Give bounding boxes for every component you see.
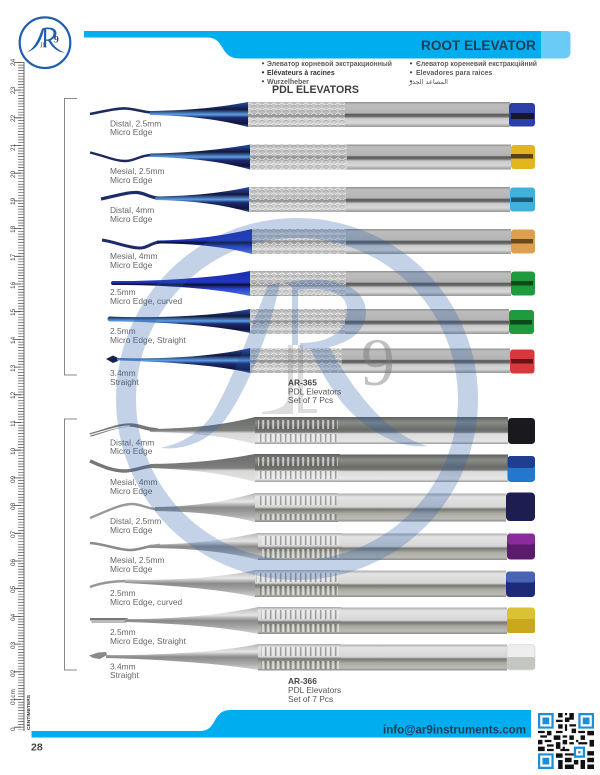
instrument: silver distal 4mm [90,417,535,444]
label: straight 3.4mm: Straight [110,670,140,680]
ruler: 18 [10,225,17,233]
email: info@ar9instruments.com [383,722,526,736]
ruler: 05 [10,585,17,593]
label: Distal 2.5mm: Distal, 2.5mm [110,118,161,128]
watermark: AR9 logo [126,228,468,570]
ruler: 21 [10,143,17,151]
ruler: 16 [10,281,17,289]
label: straight 2.5mm: 2.5mm [110,627,136,637]
multilingual name list: Elévateurs à racines [267,70,335,77]
label: Mesial 4mm: Micro Edge [110,486,153,496]
ruler: 08 [10,502,17,510]
label: Mesial 2.5mm: Mesial, 2.5mm [110,166,164,176]
instrument: blue curved 2.5mm [111,271,535,296]
ruler: 0 [10,727,17,731]
label: curved 2.5mm: Micro Edge, curved [110,597,182,607]
multilingual name list: Єлеватор кореневий екстракційний [416,60,537,68]
watermark: letters A and R [160,280,428,448]
ruler: CENTIMETERS [26,694,32,730]
bracket: upper set [64,98,77,375]
instrument: silver mesial 4mm [90,454,535,482]
ruler: 12 [10,391,17,399]
header band [84,31,570,58]
label: curved 2.5mm: 2.5mm [110,588,136,598]
logo: AR9 roundel: JL [40,42,47,50]
ruler: 06 [10,558,17,566]
ruler: 13 [10,364,17,372]
QR code [538,713,594,769]
instrument: silver straight 3.4mm [89,644,535,670]
bracket: lower set [64,419,77,670]
ruler: 22 [10,114,17,122]
multilingual name list: Элеватор корневой экстракционный [267,60,392,68]
label: straight 3.4mm: Straight [110,377,140,387]
ruler: 04 [10,613,17,621]
ruler: 24 [10,58,17,66]
ruler: 17 [10,253,17,261]
instrument: blue mesial 2.5mm [90,144,535,170]
label: straight 2.5mm: Micro Edge, Straight [110,636,187,646]
label: Mesial 4mm: Mesial, 4mm [110,477,157,487]
instrument: silver mesial 2.5mm [90,533,535,560]
multilingual name list [262,60,537,86]
instrument: blue straight 3.4mm [106,348,534,374]
ruler [10,58,32,731]
instrument: silver curved 2.5mm [90,570,535,597]
logo: AR9 roundel: 9 [54,36,59,46]
label: Distal 2.5mm: Micro Edge [110,127,153,137]
watermark: serif glyphs [262,324,395,414]
ruler: 07 [10,530,17,538]
label: Mesial 4mm: Micro Edge [110,260,153,270]
label: Mesial 2.5mm: Mesial, 2.5mm [110,555,164,565]
footer band [32,710,531,738]
set caption: AR-365: PDL Elevators [288,386,341,396]
label: curved 2.5mm: Micro Edge, curved [110,296,182,306]
label: straight 3.4mm: 3.4mm [110,368,136,378]
ruler: 09 [10,475,17,483]
heading: PDL Elevators: PDL ELEVATORS [272,84,359,96]
multilingual name list: Elevadores para raices [416,70,492,77]
multilingual name list: المصاعد الجذر [408,78,448,86]
label: Distal 4mm: Distal, 4mm [110,205,154,215]
watermark: serif glyphs: 9 [361,324,395,400]
label: Mesial 2.5mm: Micro Edge [110,175,153,185]
ruler: 03 [10,641,17,649]
ruler: 15 [10,308,17,316]
label: Distal 4mm: Micro Edge [110,214,153,224]
label: Distal 2.5mm: Distal, 2.5mm [110,516,161,526]
label: straight 2.5mm: 2.5mm [110,326,136,336]
label: Mesial 4mm: Mesial, 4mm [110,251,157,261]
logo: AR9 roundel [20,17,70,68]
label: straight 2.5mm: Micro Edge, Straight [110,335,187,345]
title: ROOT ELEVATOR [421,38,536,53]
ruler: 23 [10,86,17,94]
ruler: 20 [10,170,17,178]
ruler: 02 [10,669,17,677]
instrument: silver straight 2.5mm [90,607,535,634]
ruler: 01cm [10,689,17,705]
instrument: blue distal 4mm [101,187,535,212]
label: curved 2.5mm: 2.5mm [110,287,136,297]
label: Mesial 2.5mm: Micro Edge [110,564,153,574]
watermark: ring [126,228,468,570]
instrument: blue distal 2.5mm [90,102,535,127]
ruler: 14 [10,336,17,344]
set caption: AR-365: AR-365 [288,378,317,388]
page number: 28 [31,742,43,754]
label: Distal 4mm: Micro Edge [110,446,153,456]
set caption: AR-366: Set of 7 Pcs [288,694,333,704]
instrument: silver distal 2.5mm [90,492,535,522]
ruler: 19 [10,197,17,205]
ruler: 10 [10,447,17,455]
set caption: AR-366: PDL Elevators [288,685,341,695]
label: Distal 4mm: Distal, 4mm [110,438,154,448]
set caption: AR-366: AR-366 [288,676,317,686]
set caption: AR-365: Set of 7 Pcs [288,395,333,405]
instrument: blue straight 2.5mm [108,309,534,334]
multilingual name list: Wurzelheber [267,79,309,86]
label: straight 3.4mm: 3.4mm [110,662,136,672]
label: Distal 2.5mm: Micro Edge [110,525,153,535]
instrument: blue mesial 4mm [102,229,535,254]
ruler: 11 [10,420,17,427]
